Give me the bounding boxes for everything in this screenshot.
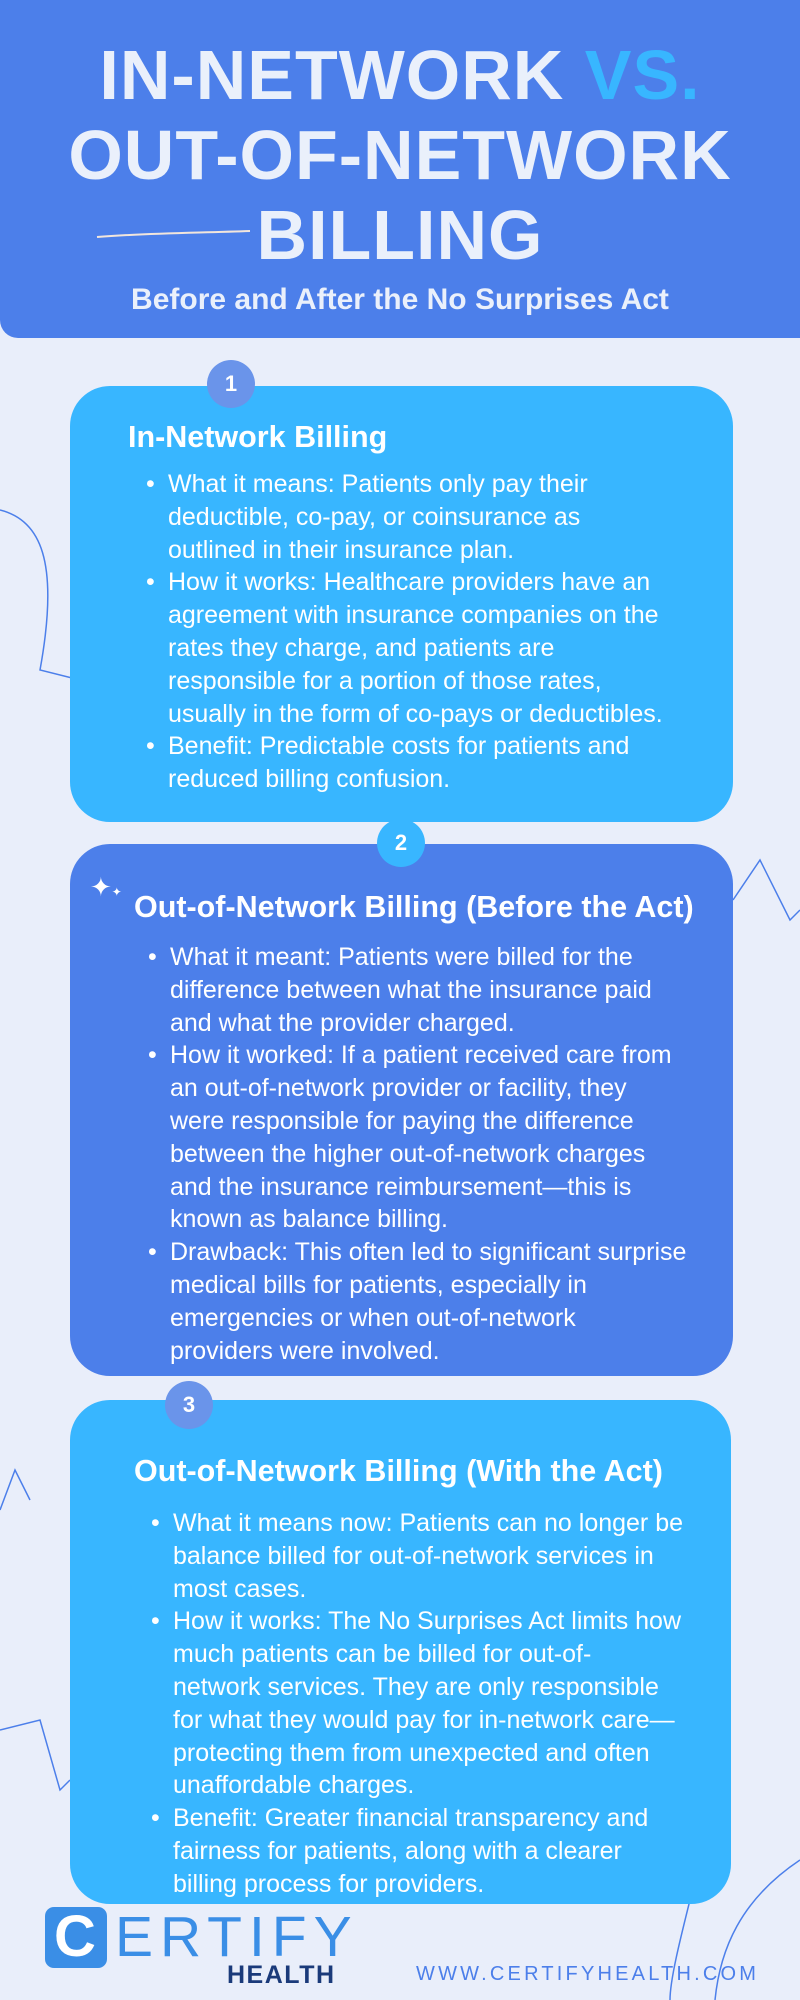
bullets 1: What it means: Patients only pay their bbox=[168, 470, 588, 498]
title: BILLING bbox=[257, 196, 543, 274]
bullets 3: How it works: The No Surprises Act limits how bbox=[173, 1607, 681, 1635]
badge 3 bbox=[165, 1381, 213, 1429]
bullets 1: Benefit: Predictable costs for patients and bbox=[168, 732, 629, 760]
bullets 3 bbox=[152, 1509, 683, 1898]
badge 2: 2 bbox=[395, 830, 407, 855]
logo: ERTIFY bbox=[115, 1905, 359, 1969]
bullets 3: much patients can be billed for out-of- bbox=[173, 1640, 591, 1668]
logo: C bbox=[54, 1904, 96, 1969]
bullets 2 bbox=[149, 943, 686, 1365]
bullets 2: were responsible for paying the difference bbox=[170, 1107, 634, 1135]
title: OUT-OF-NETWORK bbox=[68, 116, 732, 194]
title: IN-NETWORK VS. bbox=[99, 36, 701, 114]
bullets 2: known as balance billing. bbox=[170, 1205, 448, 1233]
bullets 2: difference between what the insurance paid bbox=[170, 976, 652, 1004]
bullets 1: agreement with insurance companies on the bbox=[168, 601, 659, 629]
badge 2 bbox=[377, 819, 425, 867]
heading 3: Out-of-Network Billing (With the Act) bbox=[134, 1454, 663, 1488]
panel 3 bbox=[70, 1400, 731, 1904]
bullets 3: What it means now: Patients can no longer be bbox=[173, 1509, 683, 1537]
bullets 2: What it meant: Patients were billed for the bbox=[170, 943, 633, 971]
bullets 2: providers were involved. bbox=[170, 1337, 440, 1365]
panel 2 bbox=[70, 844, 733, 1376]
bullets 1: responsible for a portion of those rates, bbox=[168, 667, 602, 695]
bullets 1: How it works: Healthcare providers have an bbox=[168, 568, 650, 596]
sparkle icon: ✦✦ bbox=[90, 872, 122, 902]
header bbox=[0, 0, 800, 338]
logo: HEALTH bbox=[227, 1961, 336, 1989]
bullets 3: billing process for providers. bbox=[173, 1870, 484, 1898]
badge 1 bbox=[207, 360, 255, 408]
heading 1: In-Network Billing bbox=[128, 420, 387, 454]
badge 3: 3 bbox=[183, 1392, 195, 1417]
bullets 3: Benefit: Greater financial transparency and bbox=[173, 1804, 648, 1832]
bullets 1: deductible, co-pay, or coinsurance as bbox=[168, 503, 580, 531]
badge 1: 1 bbox=[225, 371, 237, 396]
bullets 3: for what they would pay for in-network care— bbox=[173, 1706, 675, 1734]
website url: WWW.CERTIFYHEALTH.COM bbox=[416, 1963, 759, 1985]
bullets 2: medical bills for patients, especially in bbox=[170, 1271, 587, 1299]
bullets 3: protecting them from unexpected and often bbox=[173, 1739, 650, 1767]
bullets 2: emergencies or when out-of-network bbox=[170, 1304, 576, 1332]
bullets 1: usually in the form of co-pays or deductibles. bbox=[168, 700, 663, 728]
logo bbox=[45, 1904, 359, 1989]
bullets 3: unaffordable charges. bbox=[173, 1771, 414, 1799]
subtitle: Before and After the No Surprises Act bbox=[131, 283, 669, 316]
bullets 2: between the higher out-of-network charges bbox=[170, 1140, 645, 1168]
bullets 2: and what the provider charged. bbox=[170, 1009, 515, 1037]
bullets 2: How it worked: If a patient received care from bbox=[170, 1041, 672, 1069]
bullets 1: rates they charge, and patients are bbox=[168, 634, 554, 662]
bullets 3: balance billed for out-of-network services in bbox=[173, 1542, 654, 1570]
title bbox=[68, 36, 732, 274]
bullets 3: fairness for patients, along with a clearer bbox=[173, 1837, 622, 1865]
bullets 1: outlined in their insurance plan. bbox=[168, 536, 514, 564]
panel 1 bbox=[70, 386, 733, 822]
bullets 3: most cases. bbox=[173, 1575, 306, 1603]
bullets 2: Drawback: This often led to significant surprise bbox=[170, 1238, 686, 1266]
heading 2: Out-of-Network Billing (Before the Act) bbox=[134, 890, 694, 924]
bullets 1 bbox=[147, 470, 663, 793]
bullets 3: network services. They are only responsible bbox=[173, 1673, 659, 1701]
bullets 1: reduced billing confusion. bbox=[168, 765, 450, 793]
bullets 2: an out-of-network provider or facility, they bbox=[170, 1074, 627, 1102]
bullets 2: and the insurance reimbursement—this is bbox=[170, 1173, 631, 1201]
